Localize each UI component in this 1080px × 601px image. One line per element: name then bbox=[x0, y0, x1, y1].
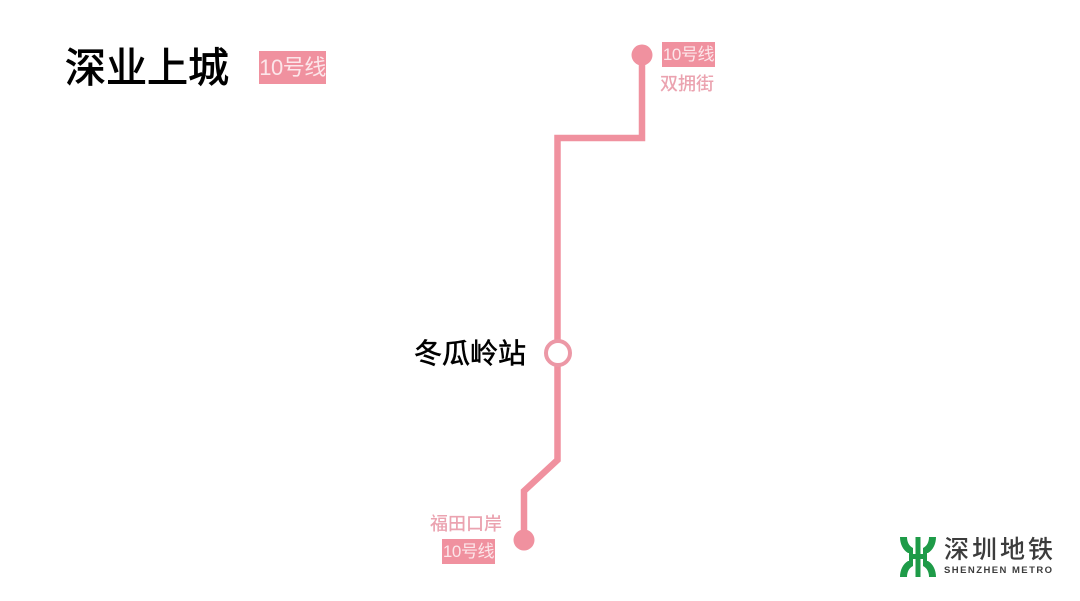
station label: 冬瓜岭站: 冬瓜岭站 bbox=[414, 338, 526, 369]
line badge: top terminal: 10号线 bbox=[663, 45, 714, 64]
line badge: 10号线 heading: 10号线 bbox=[259, 55, 326, 80]
station label: 福田口岸: 福田口岸 bbox=[430, 514, 502, 534]
terminal: 福田口岸 bbox=[514, 530, 534, 550]
logo text: SHENZHEN METRO: SHENZHEN METRO bbox=[944, 565, 1054, 576]
line badge: bottom terminal: 10号线 bbox=[443, 542, 494, 561]
icon: metro logo mark bbox=[900, 537, 936, 577]
logo: Shenzhen Metro bbox=[900, 536, 1056, 577]
title: 深业上城 bbox=[65, 45, 229, 91]
station marker: 冬瓜岭站 bbox=[546, 341, 570, 365]
logo text: 深圳地铁: 深圳地铁 bbox=[944, 536, 1056, 564]
station label: 双拥街: 双拥街 bbox=[660, 74, 714, 94]
terminal: 双拥街 bbox=[632, 44, 652, 66]
